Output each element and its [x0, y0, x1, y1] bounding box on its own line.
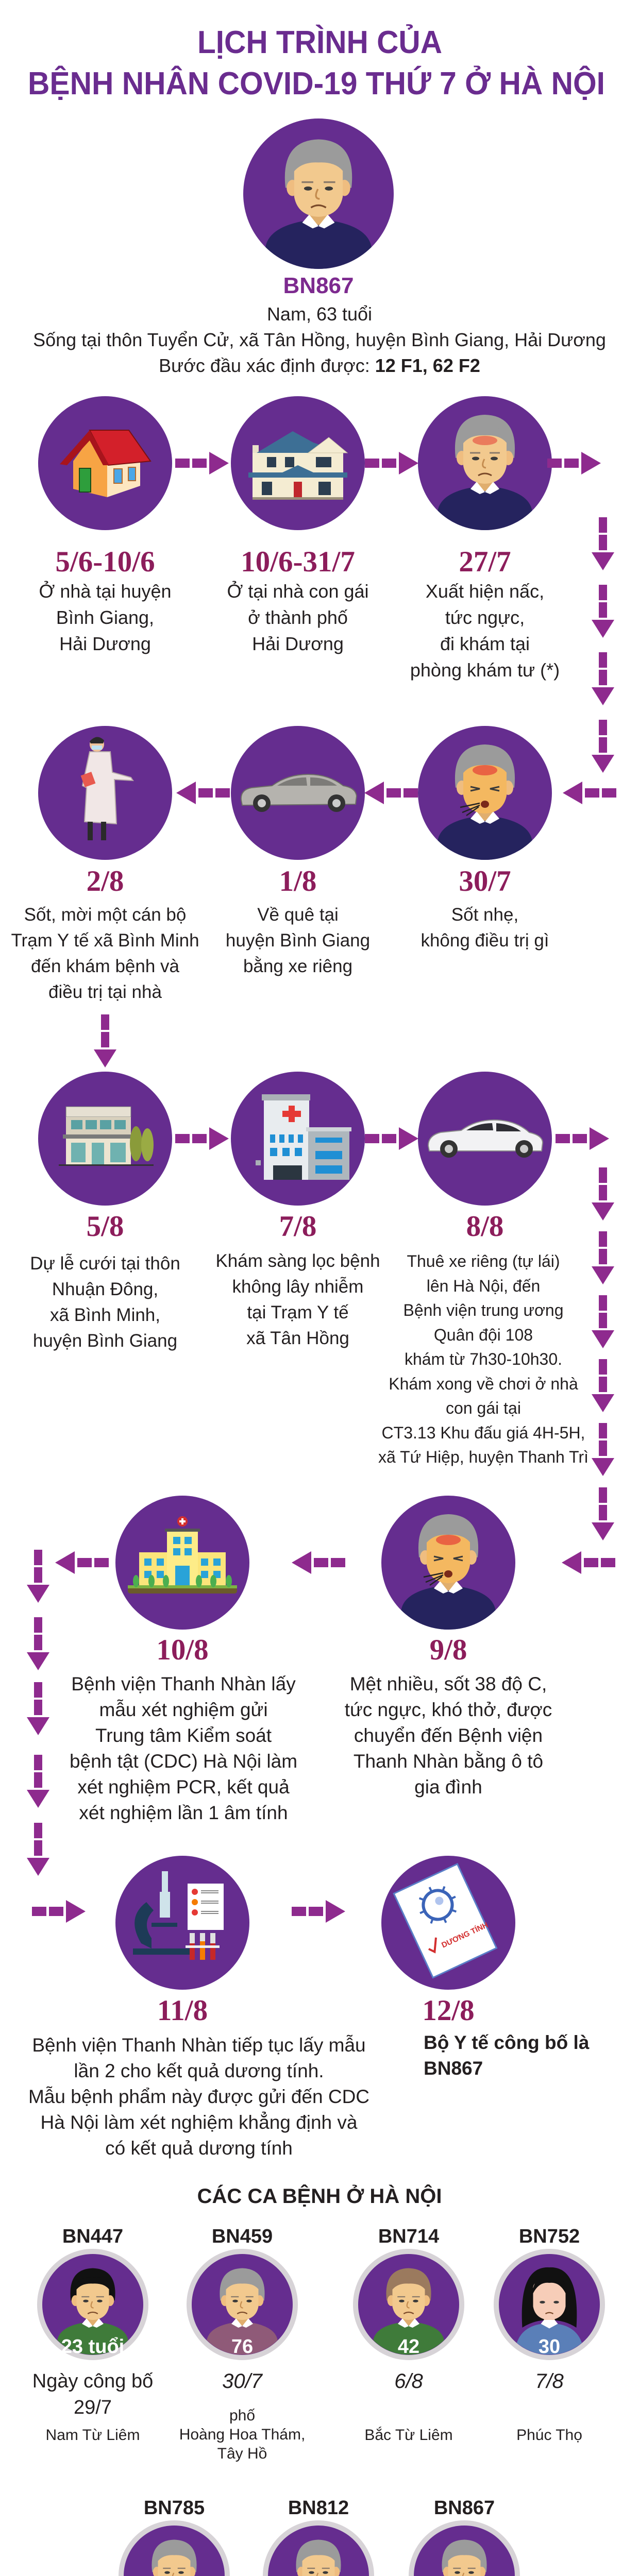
text: khám từ 7h30-10h30.: [405, 1350, 562, 1368]
text: Bệnh viện Thanh Nhàn lấy: [71, 1673, 296, 1694]
text: Hà Nội làm xét nghiệm khẳng định và: [41, 2112, 357, 2133]
title: BỆNH NHÂN COVID-19 THỨ 7 Ở HÀ NỘI: [28, 66, 605, 101]
arrow: [365, 1127, 418, 1150]
cases: BN752: [494, 2249, 605, 2360]
date: 12/8: 12/8: [422, 1994, 475, 2027]
text: có kết quả dương tính: [105, 2138, 293, 2159]
text: Quân đội 108: [434, 1325, 533, 1344]
date: 9/8: 9/8: [430, 1634, 467, 1666]
text: Ở tại nhà con gái: [227, 581, 369, 602]
circle: two-storey house: [231, 396, 365, 530]
text: [226, 905, 370, 976]
date: 27/7: 27/7: [459, 546, 511, 578]
circle: positive document: DƯƠNG TÍNH: [440, 1921, 490, 1950]
text: [11, 905, 199, 1002]
text: tức ngực, khó thở, được: [345, 1699, 552, 1720]
text: Ở nhà tại huyện: [39, 581, 172, 602]
circle: doctor: [38, 726, 172, 860]
date: 1/8: 1/8: [279, 865, 316, 897]
text: Bình Giang,: [56, 607, 154, 628]
text: [410, 581, 560, 681]
circle: white car: [418, 1072, 552, 1206]
text: lần 2 cho kết quả dương tính.: [74, 2060, 324, 2081]
date: 8/8: 8/8: [466, 1210, 503, 1243]
cases: BN812: [263, 2520, 374, 2576]
case date: BN459: 30/7: [222, 2370, 262, 2393]
text: Mệt nhiều, sốt 38 độ C,: [350, 1673, 547, 1694]
text: huyện Bình Giang: [226, 930, 370, 951]
text: Sốt nhẹ,: [451, 905, 518, 925]
date: 5/8: 5/8: [87, 1210, 124, 1243]
text: điều trị tại nhà: [48, 982, 162, 1002]
ages: 42: [398, 2336, 419, 2358]
case date: BN752: 7/8: [535, 2370, 564, 2393]
text: Khám sàng lọc bệnh: [215, 1251, 380, 1271]
arrow: left column down: [27, 1550, 49, 1876]
text: Mẫu bệnh phẩm này được gửi đến CDC: [28, 2086, 369, 2107]
circle: 30/7 sick: [418, 726, 552, 862]
text: Xuất hiện nấc,: [426, 581, 544, 602]
circle: wedding venue building: [38, 1072, 172, 1206]
text: tức ngực,: [445, 607, 525, 628]
label: BN714: BN714: [378, 2226, 439, 2247]
text: [421, 905, 549, 951]
circle: Thanh Nhan hospital: [115, 1496, 249, 1630]
intro text: [33, 303, 606, 376]
heading: cases in Hanoi: CÁC CA BỆNH Ở HÀ NỘI: [197, 2185, 442, 2208]
text: đi khám tại: [440, 633, 530, 654]
cases: BN459: [187, 2249, 298, 2360]
text: xét nghiệm lần 1 âm tính: [79, 1802, 288, 1823]
text: CT3.13 Khu đấu giá 4H-5H,: [382, 1423, 585, 1442]
title: LỊCH TRÌNH CỦA: [197, 25, 442, 60]
text: mẫu xét nghiệm gửi: [99, 1699, 268, 1720]
text: Hải Dương: [252, 633, 344, 654]
label: BN447: BN447: [62, 2226, 123, 2247]
text: [345, 1673, 552, 1798]
text: xét nghiệm PCR, kết quả: [77, 1776, 290, 1798]
case date: BN447: [32, 2370, 153, 2418]
location: BN459: [179, 2407, 305, 2462]
label: BN812: BN812: [288, 2497, 349, 2519]
location: BN459: Tây Hồ: [217, 2445, 267, 2462]
text: Trung tâm Kiểm soát: [95, 1725, 272, 1746]
text: xã Tân Hồng: [246, 1328, 349, 1348]
text: Bệnh viện trung ương: [403, 1301, 564, 1319]
text: BN867: [424, 2058, 483, 2079]
text: xã Tứ Hiệp, huyện Thanh Trì: [378, 1448, 588, 1466]
arrow: [292, 1551, 345, 1574]
case date: BN714: 6/8: [394, 2370, 423, 2393]
arrow: [547, 452, 601, 474]
intro text: Nam, 63 tuổi: [267, 303, 372, 325]
location: BN447: Nam Từ Liêm: [46, 2427, 140, 2444]
arrow: [175, 1127, 229, 1150]
arrow: [32, 1900, 86, 1923]
text: ở thành phố: [248, 607, 348, 628]
date: 11/8: 11/8: [157, 1994, 208, 2027]
date: 7/8: 7/8: [279, 1210, 316, 1243]
arrow: turn left: [563, 782, 616, 804]
circle: 9/8 sick: [381, 1496, 515, 1632]
intro text: Sống tại thôn Tuyển Cử, xã Tân Hồng, huyện Bình Giang, Hải Dương: [33, 329, 606, 350]
label: BN459: BN459: [212, 2226, 273, 2247]
date: 2/8: 2/8: [87, 865, 124, 897]
arrow: [176, 782, 230, 804]
arrow: [556, 1127, 609, 1150]
label: BN785: BN785: [144, 2497, 205, 2519]
intro text: Bước đầu xác định được: 12 F1, 62 F2: [159, 355, 480, 376]
cases: BN447: [37, 2249, 148, 2360]
circle: clinic building: [231, 1072, 365, 1206]
arrow: [292, 1900, 345, 1923]
text: Bệnh viện Thanh Nhàn tiếp tục lấy mẫu: [32, 2035, 366, 2056]
text: đến khám bệnh và: [31, 956, 179, 976]
circle: car grey: [231, 726, 365, 860]
intro: BN867: BN867: [283, 273, 354, 298]
ages: [61, 2336, 560, 2576]
title: [28, 25, 605, 101]
text: Về quê tại: [257, 905, 339, 925]
portrait: BN867: [243, 118, 394, 272]
circle: home red roof: [38, 396, 172, 530]
text: Sốt, mời một cán bộ: [24, 905, 186, 925]
text: Thuê xe riêng (tự lái): [407, 1252, 560, 1270]
text: tại Trạm Y tế: [247, 1302, 349, 1323]
cases: BN785: [119, 2520, 230, 2576]
arrow: turn left: [562, 1551, 615, 1574]
circle: microscope lab: [115, 1856, 249, 1990]
date: 5/6-10/6: 5/6-10/6: [55, 546, 155, 578]
ages: 30: [539, 2336, 560, 2358]
circle: 27/7 patient: [418, 396, 552, 533]
cases: BN867: [409, 2520, 520, 2576]
text: Hải Dương: [59, 633, 151, 654]
arrow: right column down 1: [592, 517, 614, 773]
text: Bộ Y tế công bố là: [424, 2032, 589, 2053]
location: BN752: Phúc Thọ: [516, 2427, 582, 2444]
text: [378, 1252, 588, 1466]
text: [28, 2035, 369, 2159]
arrow: [364, 782, 418, 804]
text: Nhuận Đông,: [52, 1279, 158, 1299]
text: Dự lễ cưới tại thôn: [30, 1253, 180, 1274]
text: phòng khám tư (*): [410, 659, 560, 681]
arrow: right column down 2: [592, 1167, 614, 1540]
text: xã Bình Minh,: [50, 1305, 160, 1325]
text: [227, 581, 369, 654]
location: BN714: Bắc Từ Liêm: [364, 2427, 453, 2444]
arrow: down from 2/8: [94, 1014, 116, 1067]
location: BN459: phố: [229, 2407, 255, 2424]
text: Thanh Nhàn bằng ô tô: [354, 1751, 543, 1772]
text: [30, 1253, 180, 1351]
text: [424, 2032, 590, 2079]
text: bằng xe riêng: [243, 956, 352, 976]
text: Khám xong về chơi ở nhà: [389, 1375, 578, 1393]
text: [215, 1251, 380, 1348]
arrow: [55, 1551, 109, 1574]
circle: positive document: [381, 1856, 515, 1990]
text: lên Hà Nội, đến: [427, 1277, 540, 1295]
case date: BN447: 29/7: [74, 2397, 112, 2418]
date: 10/8: 10/8: [156, 1634, 209, 1666]
cases: BN714: [353, 2249, 464, 2360]
location: BN459: Hoàng Hoa Thám,: [179, 2426, 305, 2443]
label: BN752: BN752: [519, 2226, 580, 2247]
text: chuyển đến Bệnh viện: [354, 1725, 543, 1746]
text: gia đình: [414, 1776, 482, 1798]
ages: 23 tuổi: [61, 2336, 124, 2358]
text: Trạm Y tế xã Bình Minh: [11, 930, 199, 951]
label: BN867: BN867: [434, 2497, 495, 2519]
text: không điều trị gì: [421, 930, 549, 951]
text: không lây nhiễm: [232, 1277, 363, 1297]
date: 10/6-31/7: 10/6-31/7: [241, 546, 355, 578]
text: bệnh tật (CDC) Hà Nội làm: [70, 1751, 297, 1772]
date: 30/7: 30/7: [459, 865, 511, 897]
arrow: [365, 452, 418, 474]
text: con gái tại: [446, 1399, 521, 1417]
case date: BN447: Ngày công bố: [32, 2370, 153, 2392]
text: huyện Bình Giang: [33, 1331, 177, 1351]
text: [39, 581, 172, 654]
arrow: [175, 452, 229, 474]
ages: 76: [231, 2336, 253, 2358]
text: [70, 1673, 297, 1823]
